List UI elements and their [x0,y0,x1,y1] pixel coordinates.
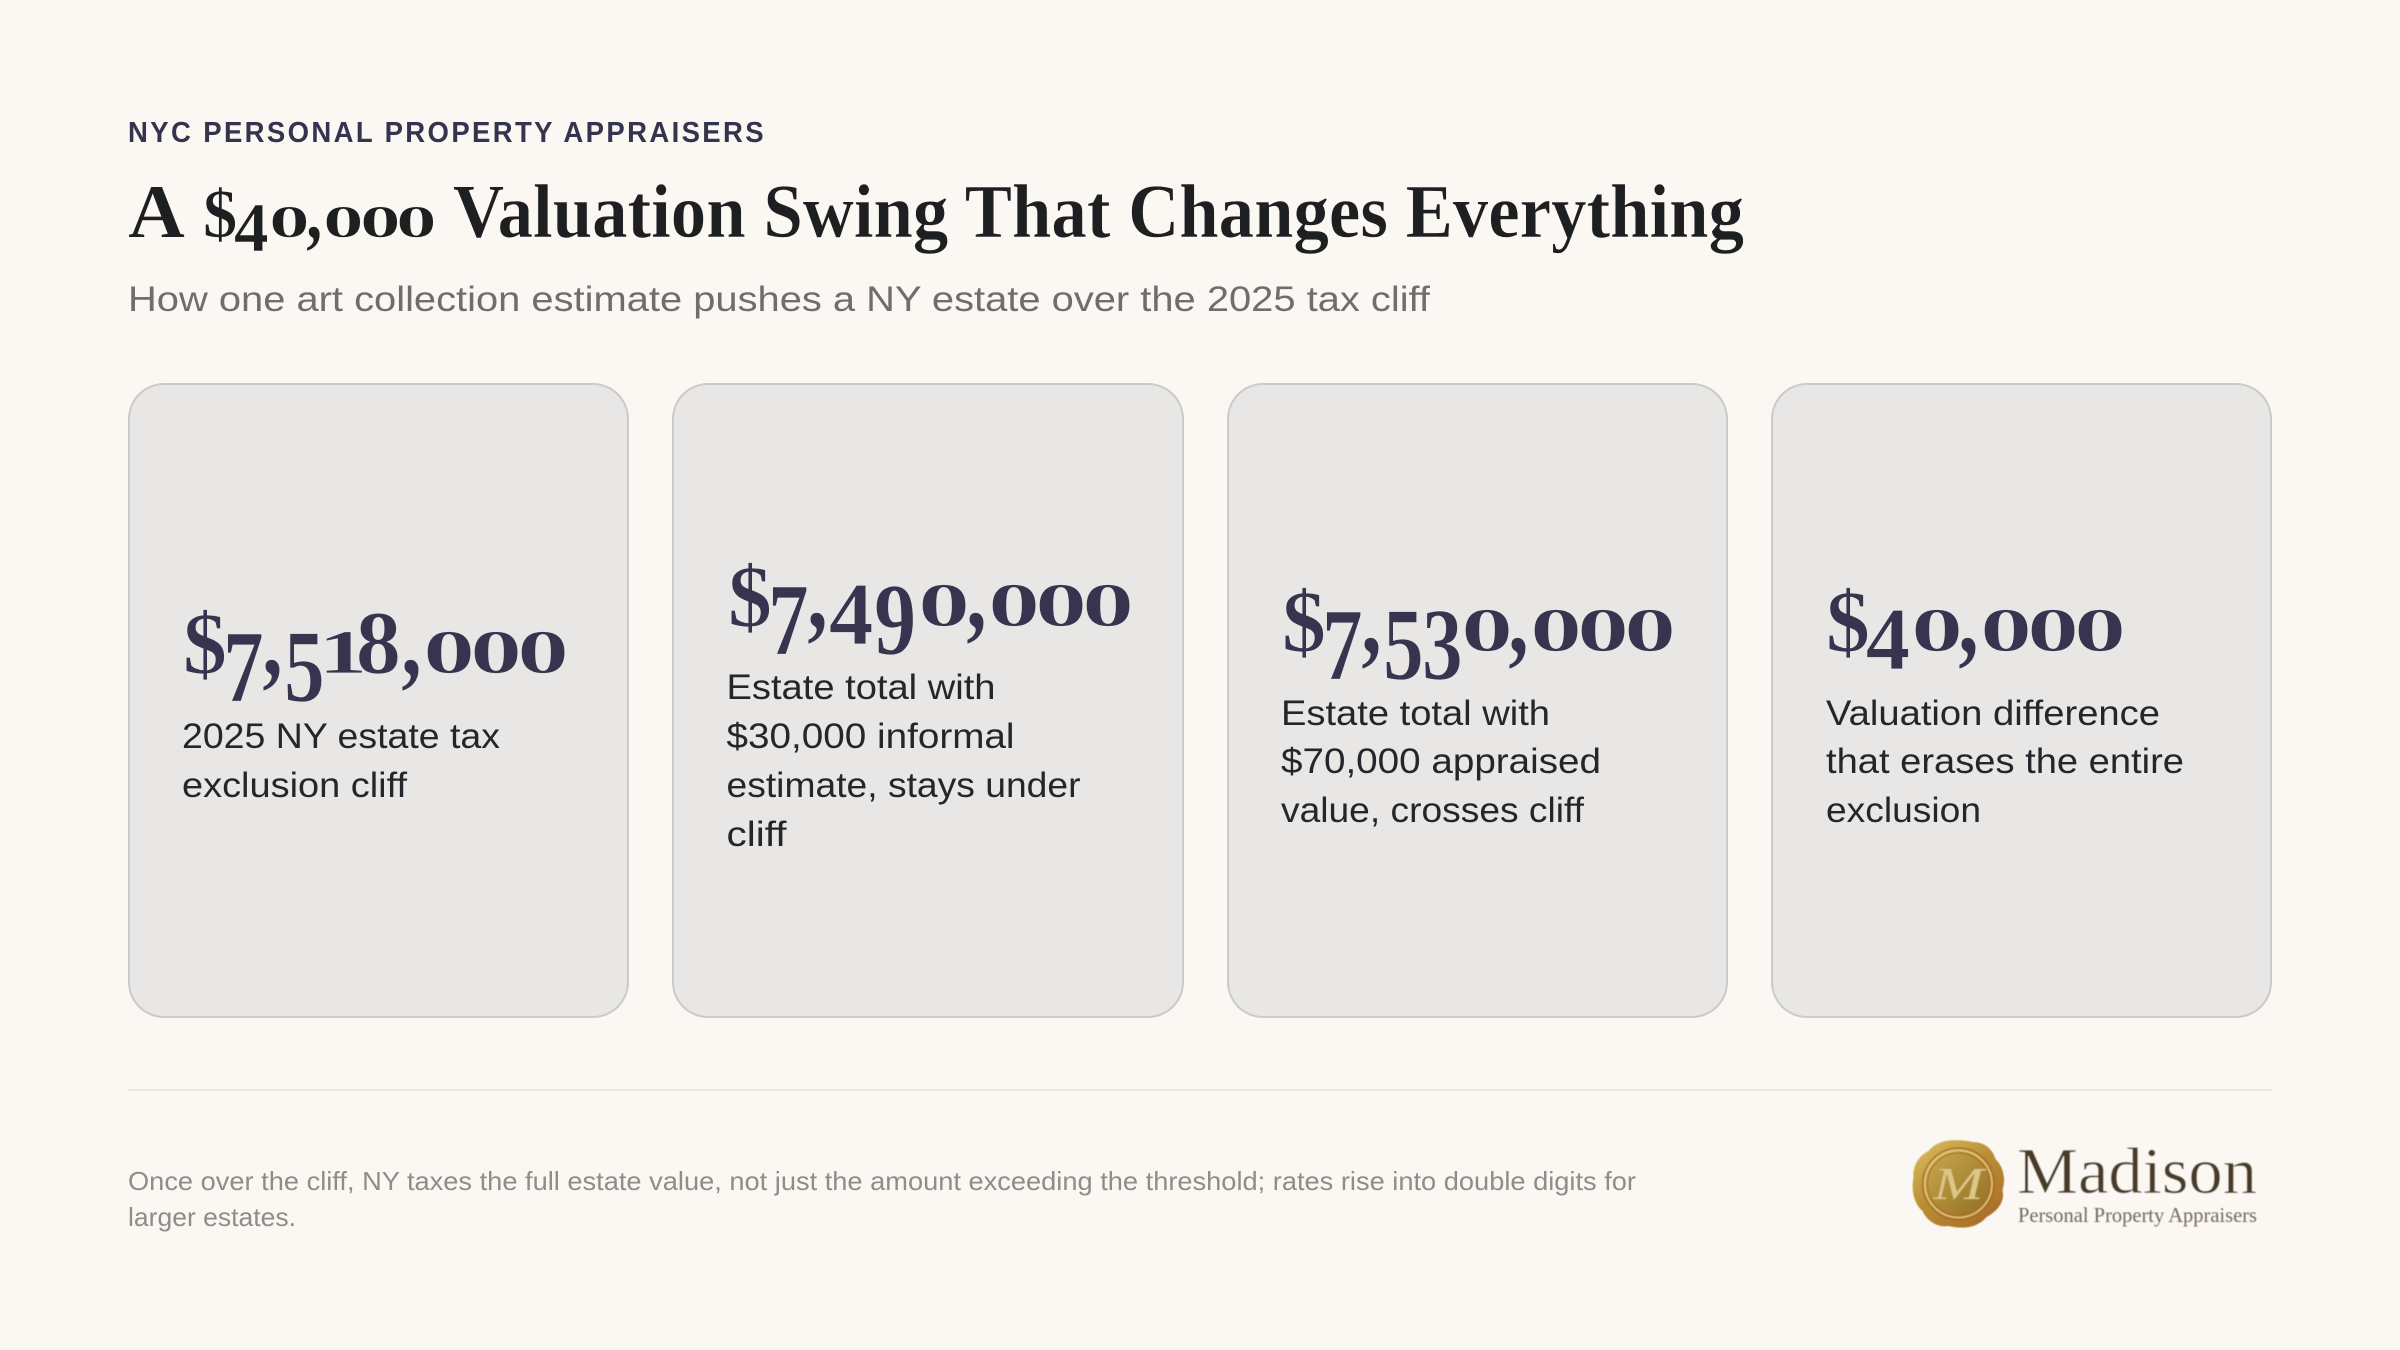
title: $ [203,176,237,252]
stat: 7,490,000: 7 [768,563,808,677]
panel: informal estimate [672,383,1184,1018]
stat: 40,000 [1826,559,2126,689]
description: 2025 NY estate tax [182,717,501,756]
panel: valuation difference [1771,383,2272,1018]
stat: 7,490,000: 0 [918,572,971,640]
stat: 7,518,000: 5 [284,610,324,724]
eyebrow: NYC PERSONAL PROPERTY APPRAISERS [128,117,766,149]
stat: 40,000: , [1958,559,1979,676]
stat: 7,518,000 [183,581,569,724]
stat: 40,000: 0 [1911,597,1963,665]
stat: 7,490,000: 4 [829,566,873,664]
description: $70,000 appraised [1281,742,1601,781]
description: Estate total with [1281,694,1550,733]
stat: 40,000: 0 [1980,597,2032,665]
stat: 7,490,000: 9 [874,563,916,677]
panel: exclusion cliff [128,383,629,1018]
icon: wax seal [1913,1140,2004,1228]
stat: 7,530,000: 0 [1530,597,1582,665]
stat: 7,490,000: , [807,534,828,651]
stat: 7,530,000: 5 [1383,588,1423,702]
description: that erases the entire [1826,742,2184,781]
stat: 7,518,000: $ [183,596,227,693]
description: Valuation difference [1826,694,2160,733]
stat: 7,490,000: 0 [988,572,1040,640]
stat: 7,518,000: 7 [223,610,263,724]
stat: 7,518,000: 0 [517,619,569,687]
title: 0 [396,197,437,247]
description: exclusion [1826,791,1981,830]
stat: 7,530,000: , [1508,559,1529,676]
description: $30,000 informal [726,717,1014,756]
stat: 40,000: $ [1826,574,1870,671]
stat: 7,530,000: , [1361,559,1382,676]
title: , [306,166,322,257]
title: A [128,170,185,254]
description [1281,694,1601,830]
stat: 7,490,000 [728,534,1134,677]
stat: 7,518,000: 0 [470,619,522,687]
stat: 7,518,000: 1 [318,619,368,687]
stat: 7,530,000: 0 [1461,597,1513,665]
tagline: Personal Property Appraisers [2018,1203,2257,1227]
description: cliff [726,815,787,854]
stat: 40,000: 0 [2074,597,2126,665]
stat: 40,000: 4 [1866,591,1910,689]
stat: 7,490,000: , [966,534,987,651]
description: estimate, stays under [726,766,1081,805]
description [182,717,501,805]
stat: 7,530,000: $ [1282,574,1326,671]
description: exclusion cliff [182,766,407,805]
title [128,166,1744,267]
title: Valuation Swing That Changes Everything [453,170,1744,254]
description [726,668,1081,854]
stat: 7,518,000: 8 [356,594,401,693]
stat: 40,000: 0 [2027,597,2079,665]
description: value, crosses cliff [1281,791,1584,830]
stat: 7,518,000: , [262,581,283,698]
description: Estate total with [726,668,996,707]
stat: 7,518,000: , [401,581,422,698]
stat: 7,530,000 [1282,559,1677,702]
title: 0 [360,197,401,247]
stat: 7,530,000: 0 [1624,597,1677,665]
title: 0 [323,197,364,247]
title: 0 [269,197,310,247]
footnote: Once over the cliff, NY taxes the full estate value, not just the amount exceeding the threshold; rates rise into double digits for [128,1166,1636,1196]
wordmark: Madison [2017,1135,2257,1208]
stat: 7,490,000: $ [728,549,772,646]
stat: 7,490,000: 0 [1035,572,1087,640]
stat: 7,530,000: 0 [1577,597,1629,665]
stat: 7,530,000: 3 [1422,588,1463,702]
panel: appraised value [1227,383,1728,1018]
subtitle: How one art collection estimate pushes a NY estate over the 2025 tax cliff [128,280,1430,319]
description [1826,694,2184,830]
stat: 7,518,000: 0 [423,619,475,687]
icon: wax seal: M [1932,1158,1987,1209]
footnote: larger estates. [128,1202,296,1232]
title: 4 [234,190,269,267]
stat: 7,530,000: 7 [1322,588,1362,702]
stat: 7,490,000: 0 [1082,572,1134,640]
